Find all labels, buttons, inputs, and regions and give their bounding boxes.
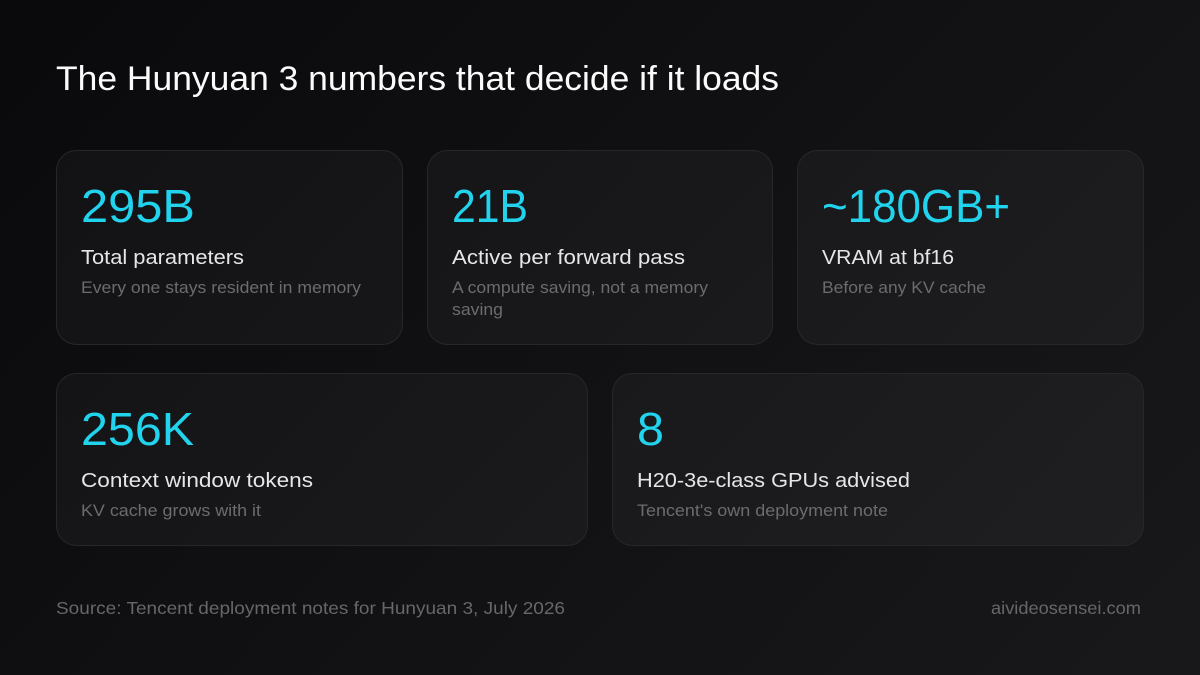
- panel: active per forward pass: [428, 150, 772, 344]
- label: active per forward pass: Active per forward pass: [452, 247, 685, 269]
- site credit: aivideosensei.com: [991, 598, 1141, 618]
- panel: total parameters: [56, 150, 402, 344]
- stat: 8: 8: [637, 403, 664, 455]
- note: KV cache grows: KV cache grows with it: [81, 502, 261, 520]
- note: compute saving: A compute saving, not a memory: [452, 279, 709, 297]
- note: before KV cache: Before any KV cache: [822, 279, 986, 297]
- stat: 295B: 295B: [81, 180, 195, 232]
- stat: 21B: 21B: [452, 180, 528, 232]
- source note: Source: Tencent deployment notes for Hunyuan 3, July 2026: [56, 598, 565, 618]
- label: context window tokens: Context window tokens: [81, 470, 313, 492]
- note: compute saving: [452, 279, 709, 319]
- panel: VRAM at bf16: [798, 150, 1144, 344]
- stat: ~180GB+: ~180GB+: [822, 180, 1010, 232]
- panel: context window: [56, 374, 588, 546]
- label: GPUs advised: H20-3e-class GPUs advised: [637, 470, 910, 492]
- title: The Hunyuan 3 numbers that decide if it loads: [56, 60, 779, 98]
- note: compute saving: saving: [452, 301, 503, 319]
- label: VRAM at bf16: VRAM at bf16: [822, 247, 954, 269]
- stat: 256K: 256K: [81, 403, 194, 455]
- panel: GPUs advised: [612, 374, 1144, 546]
- label: total parameters: Total parameters: [81, 247, 244, 269]
- note: resident in memory: Every one stays resident in memory: [81, 279, 362, 297]
- note: deployment note: Tencent's own deployment note: [637, 502, 888, 520]
